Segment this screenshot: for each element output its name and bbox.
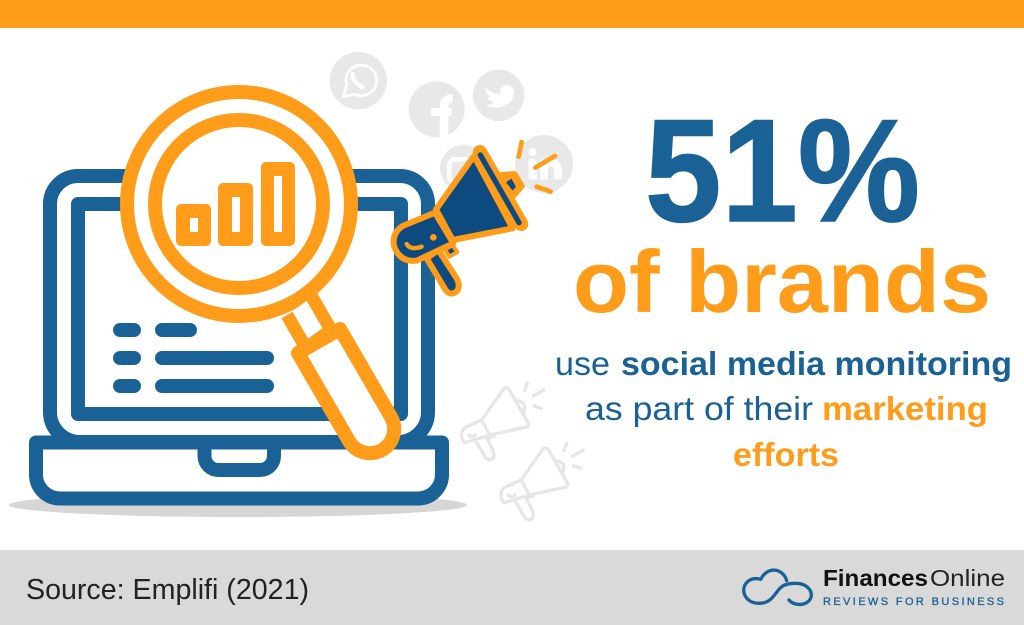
headline: of brands: of brands bbox=[573, 232, 991, 331]
description text: marketing bbox=[822, 390, 988, 427]
description text: use bbox=[555, 345, 610, 382]
headline: 51%: 51% bbox=[645, 89, 920, 252]
icon: linkedin bbox=[515, 135, 573, 193]
icon: twitter bbox=[473, 70, 524, 121]
logo: FinancesOnline: Online bbox=[930, 565, 1005, 591]
icon: laptop bbox=[36, 176, 442, 498]
icon: whatsapp bbox=[330, 52, 387, 109]
top orange band bbox=[0, 0, 1024, 28]
icon: social media circles bbox=[330, 52, 573, 193]
description text: as part of their bbox=[585, 390, 813, 427]
icon: pale megaphones bbox=[461, 383, 583, 520]
logo: FinancesOnline bbox=[744, 565, 1005, 608]
logo wordmark: Finances bbox=[823, 565, 928, 591]
pale megaphone one bbox=[461, 383, 544, 460]
laptop shadow bbox=[9, 493, 467, 517]
icon: orange megaphone bbox=[394, 142, 555, 294]
magnifier handle bbox=[287, 297, 394, 453]
description text: efforts bbox=[733, 436, 839, 473]
description text bbox=[555, 345, 1012, 473]
pale megaphone two bbox=[501, 443, 583, 520]
footer band bbox=[0, 550, 1024, 625]
icon: magnifying glass bbox=[127, 92, 394, 453]
megaphone sound rays bbox=[519, 142, 555, 192]
logo tagline: REVIEWS FOR BUSINESS bbox=[823, 596, 1004, 608]
icon: cloud bbox=[744, 570, 811, 604]
icon: instagram, partly hidden bbox=[440, 145, 487, 192]
source text: Source: Emplifi (2021) bbox=[26, 574, 309, 606]
icon: facebook bbox=[409, 81, 465, 137]
bar chart bbox=[176, 162, 295, 246]
text lines on screen bbox=[120, 330, 267, 386]
description text: social media monitoring bbox=[621, 345, 1012, 382]
